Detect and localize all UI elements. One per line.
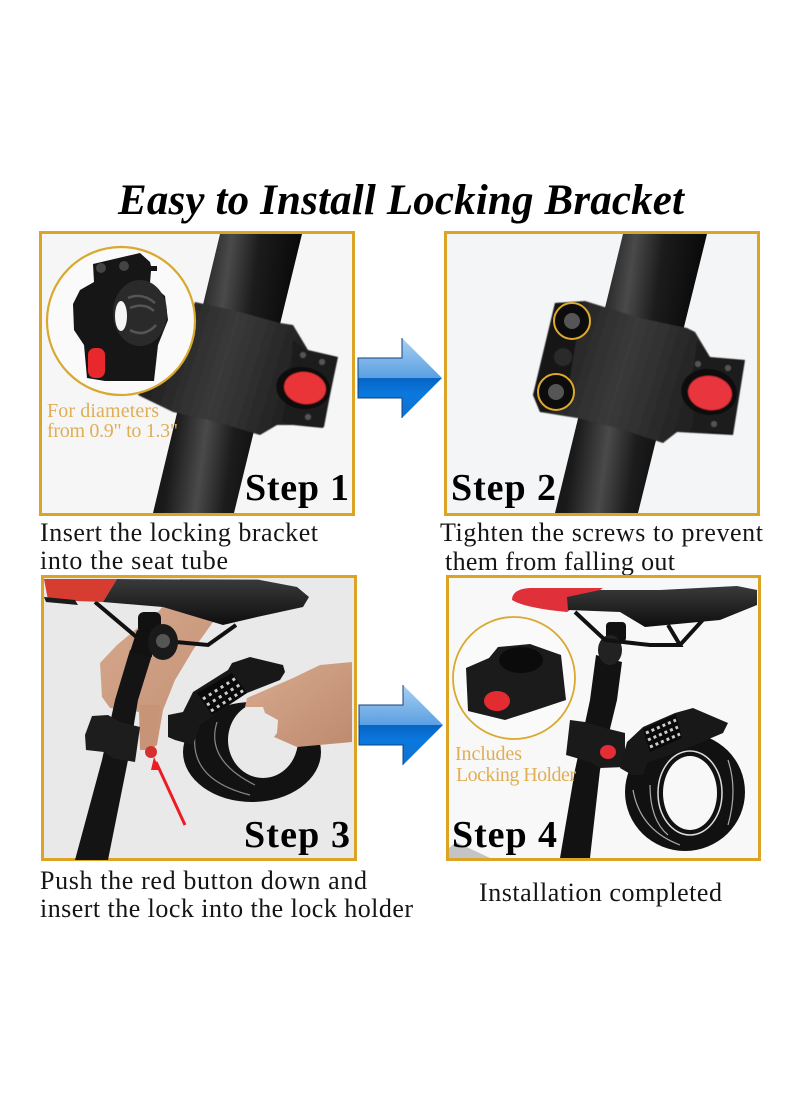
arrow: step 3 to step 4 xyxy=(359,685,443,765)
caption: step 3: Push the red button down and xyxy=(40,866,367,895)
caption: step 1 xyxy=(40,518,319,575)
caption: step 2: them from falling out xyxy=(445,547,676,576)
note: diameters: For diameters xyxy=(47,400,159,422)
red arrow xyxy=(151,757,185,825)
bracket on tube xyxy=(85,715,140,762)
right hand xyxy=(245,662,352,747)
inset circle: locking holder xyxy=(453,617,575,739)
panel: step 3 xyxy=(42,576,356,860)
red button xyxy=(686,373,734,413)
seat tube xyxy=(75,650,152,860)
caption: step 4: Installation completed xyxy=(479,878,722,907)
panel: step 4: Locking Holder xyxy=(456,764,576,786)
screw highlight bottom xyxy=(538,374,574,410)
note: locking holder: Includes xyxy=(455,743,522,765)
cable coil xyxy=(625,733,745,851)
combination lock xyxy=(620,708,728,775)
caption: step 3 xyxy=(40,866,413,923)
label: step 3: Step 3 xyxy=(244,814,350,856)
caption: step 2 xyxy=(440,518,764,576)
finger pressing red button xyxy=(140,705,160,758)
panel: step 2 xyxy=(446,232,758,514)
label: step 2: Step 2 xyxy=(451,467,556,509)
caption: step 1: into the seat tube xyxy=(40,546,228,575)
frame stripes xyxy=(449,842,490,858)
forearm and hand xyxy=(100,579,260,750)
caption: step 1: Insert the locking bracket xyxy=(40,518,319,547)
panel: step 1: from 0.9" to 1.3" xyxy=(47,420,178,442)
caption: step 2: Tighten the screws to prevent xyxy=(440,518,764,547)
label: step 4: Step 4 xyxy=(452,814,557,856)
red button xyxy=(282,369,328,407)
caption: step 3: insert the lock into the lock holder xyxy=(40,894,413,923)
bracket on tube xyxy=(566,720,625,768)
seat tube xyxy=(555,234,707,513)
saddle rails xyxy=(575,612,710,645)
saddle xyxy=(44,579,309,625)
screw highlight top xyxy=(554,303,590,339)
title: Easy to Install Locking Bracket xyxy=(117,177,686,224)
locking bracket with screws xyxy=(533,301,745,443)
saddle xyxy=(512,586,757,627)
combination lock xyxy=(168,657,285,745)
panel: step 4 xyxy=(448,576,760,860)
label: step 1: Step 1 xyxy=(245,467,349,509)
locking bracket xyxy=(138,302,338,435)
seat tube xyxy=(153,234,302,513)
inset circle: bracket detail xyxy=(47,247,195,395)
panel: step 1 xyxy=(40,232,354,514)
arrow: step 1 to step 2 xyxy=(358,338,442,418)
cable coil xyxy=(183,702,321,802)
seat tube xyxy=(560,655,622,858)
saddle rails xyxy=(95,602,236,645)
